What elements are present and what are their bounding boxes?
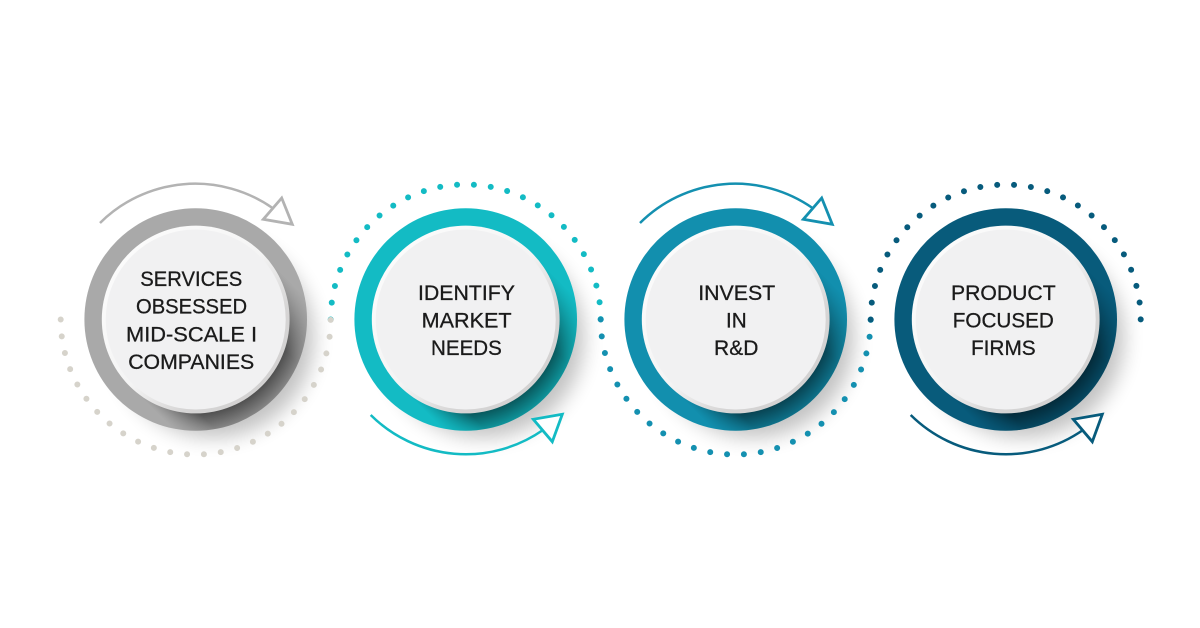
label: step 1 text: COMPANIES bbox=[128, 350, 254, 374]
disc: white face bbox=[642, 226, 830, 413]
label: step 3 text: R&D bbox=[714, 336, 758, 360]
ring: navy bbox=[894, 208, 1117, 431]
dotted arc: grey under circle 1 bbox=[61, 320, 331, 454]
label: step 4 text: FOCUSED bbox=[953, 308, 1054, 332]
label: step 1 text: SERVICES bbox=[140, 267, 242, 291]
step 2: identify market needs bbox=[354, 208, 577, 454]
ring: blue bbox=[624, 208, 847, 431]
arrow: navy bottom arc bbox=[911, 414, 1102, 454]
soft drop shadows under the rings bbox=[114, 238, 1124, 438]
label: step 4 text: FIRMS bbox=[971, 336, 1036, 360]
label: step 4 text: PRODUCT bbox=[951, 281, 1056, 305]
dotted arc: navy over circle 4 bbox=[871, 185, 1141, 320]
ring: grey bbox=[84, 208, 307, 431]
dotted arc: blue under circle 3 bbox=[601, 320, 871, 454]
disc: white face bbox=[372, 226, 560, 413]
label: step 1 text bbox=[126, 267, 257, 374]
label: step 1 text: MID-SCALE I bbox=[126, 322, 257, 346]
arrow: blue top arc bbox=[640, 184, 832, 224]
label: step 2 text: IDENTIFY bbox=[418, 281, 515, 305]
label: step 3 text: IN bbox=[726, 308, 747, 332]
dotted arc: teal over circle 2 bbox=[331, 184, 601, 320]
disc: white face bbox=[912, 226, 1100, 413]
step 3: invest in R&D bbox=[624, 184, 847, 431]
label: step 2 text: MARKET bbox=[422, 308, 512, 332]
label: step 1 text: OBSESSED bbox=[136, 295, 247, 319]
label: step 3 text: INVEST bbox=[698, 281, 775, 305]
label: step 4 text bbox=[951, 281, 1056, 360]
label: step 2 text: NEEDS bbox=[431, 336, 502, 360]
ring: teal bbox=[354, 208, 577, 431]
arrow: teal bottom arc bbox=[371, 414, 562, 454]
disc: white face bbox=[102, 226, 290, 413]
arrow: grey top arc bbox=[100, 184, 292, 224]
label: step 3 text bbox=[698, 281, 775, 360]
step 1: services obsessed mid-scale companies bbox=[84, 184, 307, 431]
label: step 2 text bbox=[418, 281, 515, 360]
step 4: product focused firms bbox=[894, 208, 1117, 454]
